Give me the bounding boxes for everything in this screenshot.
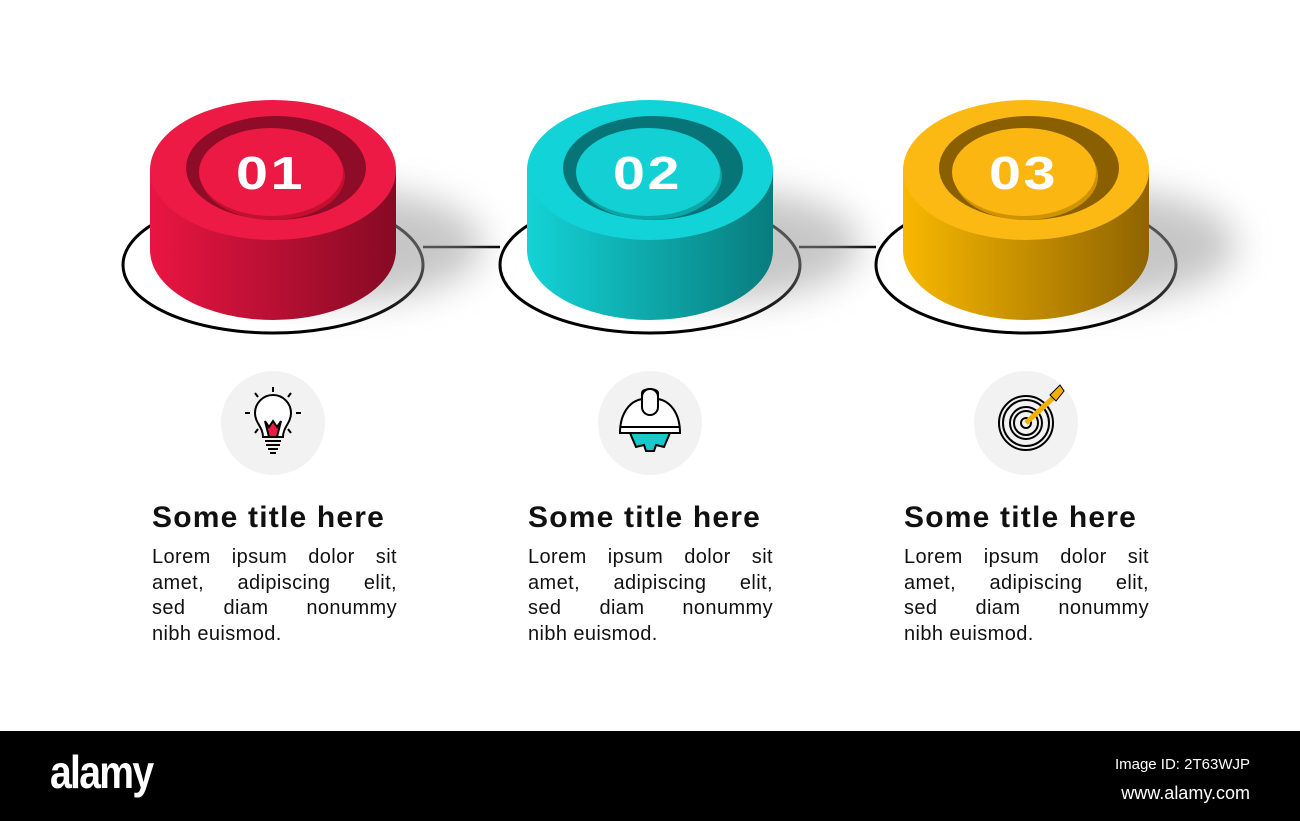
cylinder 03 [876,100,1236,333]
footer logo: alamy [50,746,152,798]
text block 1 [152,501,397,644]
text block 1: sed diam nonummy [152,597,397,619]
text block 3: Some title here [904,501,1137,534]
text block 1: Lorem ipsum dolor sit [152,546,397,568]
footer image id [1115,756,1250,803]
cylinder 02 [500,100,860,333]
text block 1: nibh euismod. [152,622,282,644]
number 02: 02 [613,148,682,200]
icon: target with arrow [974,371,1078,475]
text block 2: Some title here [528,501,761,534]
text block 3: sed diam nonummy [904,597,1149,619]
text block 2: sed diam nonummy [528,597,773,619]
text block 2: nibh euismod. [528,622,658,644]
footer image id: Image ID: 2T63WJP [1115,756,1250,773]
text block 3 [904,501,1149,644]
connector lines [423,246,876,248]
text block 3: Lorem ipsum dolor sit [904,546,1149,568]
text block 2 [528,501,773,644]
number 01: 01 [236,148,305,200]
number 03: 03 [989,148,1058,200]
text block 2: amet, adipiscing elit, [528,572,773,594]
icon: helmet with gear [598,371,702,475]
cylinder 01 [123,100,483,333]
text block 3: amet, adipiscing elit, [904,572,1149,594]
text block 1: amet, adipiscing elit, [152,572,397,594]
text block 3: nibh euismod. [904,622,1034,644]
text block 1: Some title here [152,501,385,534]
icon: lightbulb [221,371,325,475]
footer image id: www.alamy.com [1121,783,1250,803]
text block 2: Lorem ipsum dolor sit [528,546,773,568]
footer bar [0,731,1300,821]
